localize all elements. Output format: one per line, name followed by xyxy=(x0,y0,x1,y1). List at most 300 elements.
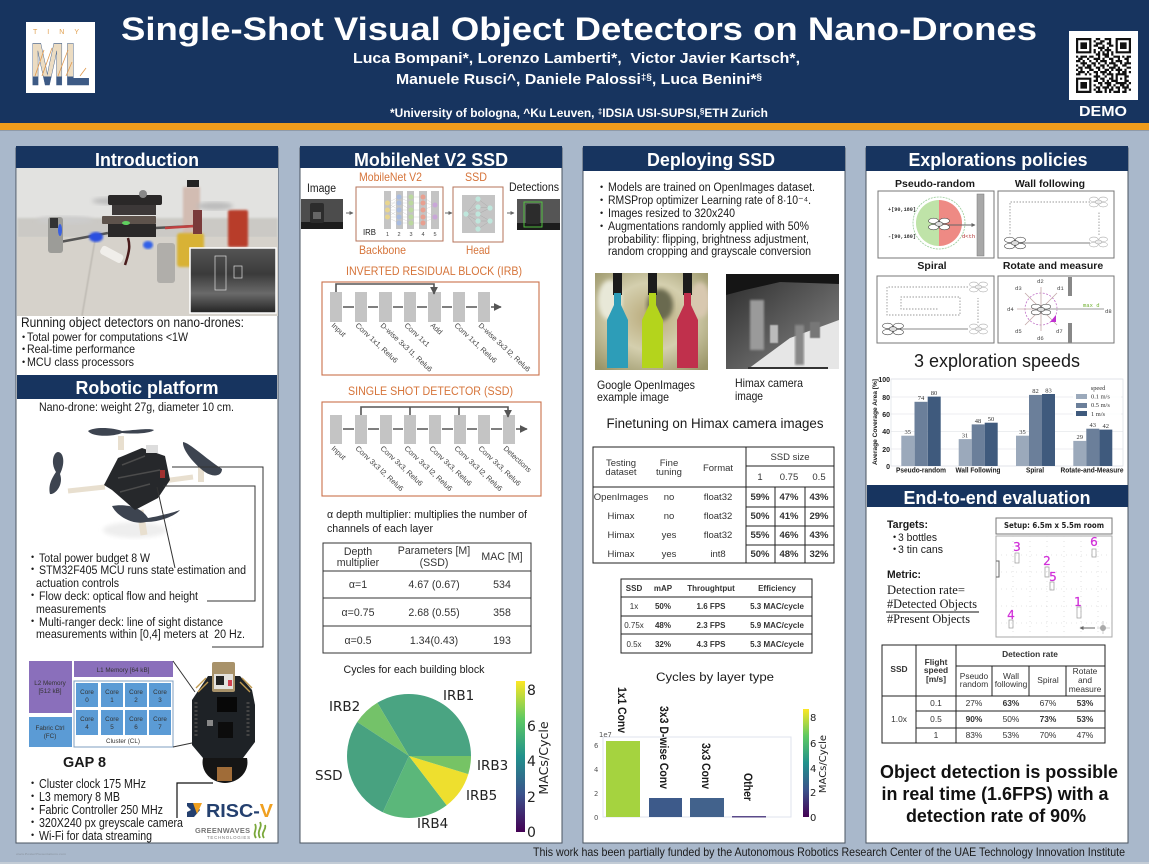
diagram: single shot detector: Conv 3x3, Relu6 xyxy=(428,444,474,488)
colorbar: MACs/Cycle: 0 xyxy=(810,813,816,824)
conclusion callout xyxy=(880,762,1118,826)
conclusion callout: Object detection is possible xyxy=(880,762,1118,782)
table: detection rate: Pseudo xyxy=(960,671,989,681)
table: depth multiplier xyxy=(323,543,531,653)
diagram: network overview: Head xyxy=(466,243,490,257)
table: depth multiplier: 2.68 (0.55) xyxy=(408,607,460,619)
bar chart: coverage by policy and speed: 31 xyxy=(962,432,968,440)
table: finetuning results: tuning xyxy=(656,467,682,478)
table: depth multiplier: multiplier xyxy=(337,557,380,569)
heading: deploying SSD: Deploying SSD xyxy=(647,150,775,170)
diagram: inverted residual block: INVERTED RESIDUAL BLOCK (IRB) xyxy=(346,264,522,278)
affiliations: ‡ xyxy=(598,107,602,116)
table: finetuning results: 32% xyxy=(809,549,829,560)
table: detection rate: following xyxy=(995,679,1028,689)
diagram: inverted residual block: D-wise 3x3 l1, Relu6 xyxy=(379,321,434,374)
text block: training bullets: RMSProp optimizer Learning rate of 8·10⁻⁴. xyxy=(608,195,811,207)
table: finetuning results: Fine xyxy=(660,458,678,469)
text block: GAP8 bullets: • xyxy=(31,778,34,788)
table: finetuning results: no xyxy=(664,511,674,522)
diagram: setup room map: 4 xyxy=(1007,608,1015,622)
authors: Manuele Rusci^, Daniele Palossi xyxy=(396,72,620,88)
authors: § xyxy=(757,72,762,82)
pie chart: cycles for each building block: IRB1 xyxy=(443,688,474,704)
table: detection rate: Rotate xyxy=(1073,666,1098,676)
diagram: GAP8 architecture: 1 xyxy=(110,697,114,704)
panel: introduction and robotic platform xyxy=(16,146,278,843)
diagram: inverted residual block: Add xyxy=(429,321,444,336)
text block: training bullets: Images resized to 320x240 xyxy=(608,208,735,220)
text block: targets and metric: Metric: xyxy=(887,569,921,581)
demo label: DEMO xyxy=(1079,103,1127,120)
diagram: GAP8 architecture: Core xyxy=(105,716,119,723)
text block: intro bullets: Running object detectors on nano-drones: xyxy=(21,315,244,330)
table: detection rate: [m/s] xyxy=(926,674,946,684)
text block: targets and metric: 3 tin cans xyxy=(898,544,943,556)
diagram: GAP8 architecture: 4 xyxy=(85,724,89,731)
table: detection rate: 53% xyxy=(1077,714,1094,724)
table: finetuning results: float32 xyxy=(704,492,732,503)
text block: targets and metric xyxy=(886,519,979,626)
heading: MobileNet V2 SSD: MobileNet V2 SSD xyxy=(354,150,508,170)
text block: targets and metric: Targets: xyxy=(887,519,928,531)
table: throughput and efficiency: Efficiency xyxy=(758,584,796,593)
diagram: GAP8 architecture: Core xyxy=(80,689,94,696)
photo: Himax camera image xyxy=(726,274,839,369)
heading: end-to-end evaluation: End-to-end evaluation xyxy=(904,488,1090,508)
diagram: GAP8 architecture: 5 xyxy=(110,724,114,731)
diagram: inverted residual block: Conv 1x1 xyxy=(403,321,432,349)
bar chart: coverage by policy and speed: 43 xyxy=(1090,422,1096,429)
table: depth multiplier: 1.34(0.43) xyxy=(410,635,458,647)
text block: training bullets xyxy=(600,182,815,258)
diagram: single shot detector: Conv 3x3 l2, Relu6 xyxy=(354,444,405,493)
diagram: GAP8 architecture: Core xyxy=(105,689,119,696)
text block: intro bullets: • xyxy=(22,344,25,354)
diagram: network overview: 2 xyxy=(397,232,401,238)
logo: tinyML: ML xyxy=(30,31,90,98)
text block: training bullets: Models are trained on OpenImages dataset. xyxy=(608,182,815,194)
table: finetuning results: no xyxy=(664,492,674,503)
text block: GAP8 bullets xyxy=(31,777,183,843)
bar chart: coverage by policy and speed: 100 xyxy=(878,377,890,384)
table: detection rate: Spiral xyxy=(1037,675,1059,685)
table: throughput and efficiency: mAP xyxy=(654,584,673,593)
photo: crazyflie nano-drone xyxy=(49,428,222,538)
heading: introduction xyxy=(16,146,278,170)
conclusion callout: detection rate of 90% xyxy=(906,806,1086,826)
text block: platform bullets: • xyxy=(31,552,34,562)
text block: intro bullets: • xyxy=(22,357,25,367)
authors xyxy=(353,51,800,88)
text block: platform bullets: STM32F405 MCU runs state estimation and xyxy=(39,563,246,577)
panel: MobileNet V2 SSD xyxy=(300,146,562,843)
affiliations: ETH Zurich xyxy=(704,106,768,120)
diagram: rotate and measure policy: d1 xyxy=(1057,285,1064,292)
diagram: network overview: Backbone xyxy=(359,243,406,257)
pie chart: cycles for each building block: IRB4 xyxy=(417,816,448,832)
bar chart: coverage by policy and speed: 80 xyxy=(882,395,890,402)
text block: platform bullets: • xyxy=(31,564,34,574)
text block: intro bullets xyxy=(21,315,244,369)
table: finetuning results: int8 xyxy=(710,549,726,560)
colorbar: MACs/Cycle: 2 xyxy=(527,790,536,806)
chart title: cycles per block: Cycles for each building block xyxy=(344,664,485,676)
table: throughput and efficiency: SSD xyxy=(626,584,642,593)
table: throughput and efficiency: 5.3 MAC/cycle xyxy=(750,602,804,611)
table: detection rate: 27% xyxy=(966,698,983,708)
diagram: rotate and measure policy: max d xyxy=(1083,302,1100,309)
diagram: inverted residual block: Conv 1x1, Relu6 xyxy=(453,321,499,365)
text block: intro bullets: Total power for computations <1W xyxy=(27,330,189,344)
bar chart: coverage by policy and speed: Wall Following xyxy=(956,466,1000,474)
bar chart: coverage by policy and speed: 20 xyxy=(882,447,890,454)
logo: tinyML: TINY xyxy=(33,29,79,36)
heading: MobileNet V2 SSD xyxy=(300,146,562,170)
footer: printer credit: www.PosterPresentations.com xyxy=(16,852,67,856)
table: detection rate: 1.0x xyxy=(891,714,908,724)
text block: depth multiplier: channels of each layer xyxy=(327,523,433,535)
diagram: network overview: 3 xyxy=(409,232,413,238)
diagram: inverted residual block xyxy=(322,264,539,375)
table: detection rate: 90% xyxy=(966,714,983,724)
text block: training bullets: random cropping and grayscale conversion xyxy=(608,246,811,258)
diagram: GAP8 architecture: Core xyxy=(153,689,167,696)
table: detection rate: 73% xyxy=(1040,714,1057,724)
table: finetuning results: 43% xyxy=(809,530,829,541)
diagram: single shot detector: Conv 3x3 l2, Relu6 xyxy=(453,444,504,493)
diagram: inverted residual block: Conv 1x1, Relu6 xyxy=(354,321,400,365)
photo: OpenImages colored bottles xyxy=(595,273,710,370)
diagram: GAP8 architecture: Core xyxy=(153,716,167,723)
diagram: inverted residual block: D-wise 3x3 l2, Relu6 xyxy=(477,321,532,374)
legend: speed: 0.1 m/s xyxy=(1091,394,1110,400)
text block: targets and metric: #Detected Objects xyxy=(887,597,977,611)
bar chart: cycles by layer type: 3x3 D-wise Conv xyxy=(657,706,671,789)
bar chart: cycles by layer type: 4 xyxy=(594,766,598,774)
diagram: single shot detector: Conv 3x3 l2, Relu6 xyxy=(403,444,454,493)
captions: example images: Google OpenImages xyxy=(597,378,695,392)
table: depth multiplier: 534 xyxy=(493,579,511,591)
bar chart: coverage by policy and speed: 82 xyxy=(1032,388,1039,395)
diagram: network overview: Detections xyxy=(509,182,559,194)
table: throughput and efficiency: 5.9 MAC/cycle xyxy=(750,621,804,630)
bar chart: cycles by layer type: 1x1 Conv xyxy=(615,687,629,733)
diagram: inverted residual block: Input xyxy=(330,321,348,339)
table: detection rate: 0.5 xyxy=(930,714,942,724)
heading: robotic platform xyxy=(17,375,277,399)
table: finetuning results: Himax xyxy=(608,549,635,560)
table: detection rate: 0.1 xyxy=(930,698,942,708)
diagram: spiral policy: Spiral xyxy=(917,260,947,272)
affiliations: § xyxy=(700,107,705,116)
table: finetuning results: Himax xyxy=(608,511,635,522)
diagram: GAP8 architecture xyxy=(29,661,173,747)
text block: platform bullets: Multi-ranger deck: line of sight distance xyxy=(39,615,223,629)
diagram: GAP8 architecture: Core xyxy=(129,716,143,723)
inset: grayscale detection view xyxy=(190,248,276,313)
text block: training bullets: Augmentations randomly applied with 50% xyxy=(608,221,809,233)
text block: GAP8 bullets: 320X240 px greyscale camera xyxy=(39,816,183,830)
pie chart: cycles for each building block: IRB2 xyxy=(329,699,360,715)
table: detection rate: measure xyxy=(1069,684,1102,694)
diagram: rotate and measure policy: d8 xyxy=(1105,308,1112,315)
diagram: rotate and measure policy: d7 xyxy=(1056,328,1063,335)
diagram: GAP8 architecture: Cluster (CL) xyxy=(106,738,140,745)
table: detection rate: speed xyxy=(924,665,948,675)
photo: drone with detection inset xyxy=(17,168,278,316)
pie chart: cycles for each building block xyxy=(315,688,508,832)
table: detection rate: 53% xyxy=(1003,730,1020,740)
bar chart: coverage by policy and speed: 29 xyxy=(1077,434,1083,441)
legend: speed: 1 m/s xyxy=(1091,411,1106,418)
captions: example images xyxy=(597,376,803,404)
table: finetuning results: 29% xyxy=(809,511,829,522)
bar chart: cycles by layer type: 0 xyxy=(594,814,598,822)
table: finetuning results: Format xyxy=(703,463,733,474)
diagram: GAP8 architecture: 7 xyxy=(158,724,162,731)
table: finetuning results: float32 xyxy=(704,511,732,522)
diagram: setup room map: 3 xyxy=(1013,540,1021,554)
table: finetuning results: 47% xyxy=(779,492,799,503)
diagram: GAP8 architecture: 3 xyxy=(158,697,162,704)
pie chart: cycles for each building block: IRB5 xyxy=(466,788,497,804)
pie chart: cycles for each building block: IRB3 xyxy=(477,758,508,774)
diagram: spiral policy xyxy=(877,260,994,343)
heading: explorations policies: Explorations policies xyxy=(908,150,1088,170)
logo: tinyML xyxy=(26,22,95,98)
table: detection rate: 50% xyxy=(1003,714,1020,724)
heading: deploying SSD xyxy=(583,146,845,171)
heading: introduction: Introduction xyxy=(95,150,199,170)
diagram: network overview: SSD xyxy=(465,170,487,184)
arrows: drone parts callouts xyxy=(157,467,263,647)
captions: example images: example image xyxy=(597,390,669,404)
bar chart: coverage by policy and speed: 0 xyxy=(886,464,890,471)
diagram: network overview: MobileNet V2 xyxy=(359,170,422,184)
table: depth multiplier: α=0.75 xyxy=(342,607,375,619)
table: throughput and efficiency: 32% xyxy=(655,640,671,649)
colorbar: MACs/Cycle: MACs/Cycle xyxy=(818,735,829,793)
heading: GAP 8: GAP 8 xyxy=(63,754,106,771)
table: depth multiplier: Parameters [M] xyxy=(398,545,470,557)
diagram: GAP8 architecture: L2 Memory xyxy=(34,680,67,687)
diagram: setup room map: 5 xyxy=(1049,570,1057,584)
diagram: GAP8 architecture: L1 Memory [64 kB] xyxy=(97,667,150,674)
diagram: GAP8 architecture: Core xyxy=(129,689,143,696)
table: detection rate: 70% xyxy=(1040,730,1057,740)
diagram: single shot detector: Input xyxy=(330,444,348,462)
diagram: pseudo-random policy xyxy=(878,178,994,258)
text block: GAP8 bullets: • xyxy=(31,804,34,814)
text block: targets and metric: 3 bottles xyxy=(898,532,937,544)
table: detection rate: 47% xyxy=(1077,730,1094,740)
diagram: pseudo-random policy: -[90,180] xyxy=(888,234,916,240)
bar chart: coverage by policy and speed: 60 xyxy=(882,412,890,419)
text block: GAP8 bullets: • xyxy=(31,830,34,840)
bar chart: cycles by layer type: 6 xyxy=(594,742,598,750)
diagram: rotate and measure policy: d2 xyxy=(1037,278,1044,285)
colorbar: MACs/Cycle: 8 xyxy=(810,713,816,724)
table: detection rate: Wall xyxy=(1003,671,1019,681)
bar chart: cycles by layer type: Other xyxy=(741,773,755,801)
diagram: wall following policy: Wall following xyxy=(1015,178,1085,190)
text block: training bullets: • xyxy=(600,182,603,192)
table: finetuning results: 0.75 xyxy=(780,472,798,483)
table: detection rate: 63% xyxy=(1003,698,1020,708)
diagram: rotate and measure policy: Rotate and measure xyxy=(1003,260,1103,272)
diagram: pseudo-random policy: Pseudo-random xyxy=(895,178,975,190)
panel: exploration policies and end-to-end evaluation xyxy=(866,146,1128,843)
pie chart: cycles for each building block: SSD xyxy=(315,768,343,784)
diagram: GAP8 architecture: Core xyxy=(80,716,94,723)
table: detection rate: 1 xyxy=(934,730,939,740)
colorbar: MACs/Cycle: MACs/Cycle xyxy=(536,721,551,795)
diagram: GAP8 architecture: [512 kB] xyxy=(38,688,62,695)
table: throughput and efficiency: 4.3 FPS xyxy=(697,640,726,649)
diagram: single shot detector: Conv 3x3, Relu6 xyxy=(477,444,523,488)
diagram: rotate and measure policy: d5 xyxy=(1015,328,1022,335)
legend: speed: 0.5 m/s xyxy=(1091,402,1110,409)
colorbar: MACs/Cycle: 8 xyxy=(527,683,536,699)
diagram: rotate and measure policy: d3 xyxy=(1015,285,1022,292)
colorbar: MACs/Cycle xyxy=(803,709,829,824)
text block: platform bullets: measurements xyxy=(36,602,106,616)
table: throughput and efficiency: Throughtput xyxy=(687,584,735,593)
diagram: setup room map: 1 xyxy=(1074,595,1082,609)
colorbar: MACs/Cycle: 2 xyxy=(810,788,816,799)
bar chart: coverage by policy and speed: Pseudo-random xyxy=(896,466,946,474)
bar chart: coverage by policy and speed xyxy=(872,377,1124,474)
logo: RISC-V: RISC- V xyxy=(206,801,273,821)
diagram: setup room map xyxy=(996,518,1112,637)
text block: intro bullets: MCU class processors xyxy=(27,355,134,369)
table: detection rate: Detection rate xyxy=(1002,649,1058,659)
captions: example images: image xyxy=(735,389,763,403)
label: image: Image xyxy=(307,183,336,195)
text block: platform bullets: • xyxy=(31,590,34,600)
text block: intro bullets: Real-time performance xyxy=(27,342,135,356)
colorbar: MACs/Cycle: 6 xyxy=(527,719,536,735)
diagram: wall following policy xyxy=(998,178,1114,258)
conclusion callout: in real time (1.6FPS) with a xyxy=(882,784,1109,804)
diagram: single shot detector: Conv 3x3, Relu6 xyxy=(379,444,425,488)
logo: GreenWaves xyxy=(195,822,265,840)
chart title: cycles by layer type: Cycles by layer type xyxy=(656,670,774,684)
text block: GAP8 bullets: Cluster clock 175 MHz xyxy=(39,777,146,791)
table: finetuning results: Testing xyxy=(606,458,636,469)
table: throughput and efficiency: 1x xyxy=(630,602,638,611)
table: finetuning results: float32 xyxy=(704,530,732,541)
text block: GAP8 bullets: • xyxy=(31,791,34,801)
text block: platform bullets: • xyxy=(31,616,34,626)
diagram: network overview: IRB xyxy=(363,228,376,237)
diagram: network overview xyxy=(301,170,560,257)
diagram: single shot detector xyxy=(322,384,541,496)
heading: finetuning: Finetuning on Himax camera images xyxy=(606,416,824,431)
table: depth multiplier: Depth xyxy=(344,546,372,558)
header banner xyxy=(0,0,1149,131)
authors: , Luca Benini* xyxy=(652,72,757,88)
diagram: network overview: 4 xyxy=(421,232,425,238)
table: finetuning results: 46% xyxy=(779,530,799,541)
table: finetuning results: 41% xyxy=(779,511,799,522)
diagram: single shot detector: SINGLE SHOT DETECTOR (SSD) xyxy=(348,384,513,398)
authors: Luca Bompani*, Lorenzo Lamberti*, Victor Javier Kartsch*, xyxy=(353,51,800,67)
arrow: camera callout xyxy=(177,783,213,818)
diagram: GAP8 architecture: 6 xyxy=(134,724,138,731)
colorbar: MACs/Cycle: 4 xyxy=(527,754,536,770)
table: finetuning results: 1 xyxy=(757,472,763,483)
table: finetuning results xyxy=(593,447,834,563)
text block: platform bullets: Total power budget 8 W xyxy=(39,551,150,565)
bar chart: coverage by policy and speed: Spiral xyxy=(1026,466,1044,474)
text block: targets and metric: #Present Objects xyxy=(887,612,970,626)
panel: deploying SSD xyxy=(583,146,845,843)
table: depth multiplier: α=1 xyxy=(349,579,367,591)
bar chart: coverage by policy and speed: 35 xyxy=(1019,429,1026,436)
text block: GAP8 bullets: Wi-Fi for data streaming xyxy=(39,829,152,843)
table: depth multiplier: 358 xyxy=(493,607,511,619)
colorbar: MACs/Cycle: 6 xyxy=(810,739,816,750)
bar chart: coverage by policy and speed: 83 xyxy=(1045,388,1052,394)
heading: 3 exploration speeds: 3 exploration speeds xyxy=(914,351,1080,371)
table: finetuning results: yes xyxy=(662,530,677,541)
table: finetuning results: Himax xyxy=(608,530,635,541)
diagram: GAP8 architecture: 2 xyxy=(134,697,138,704)
table: finetuning results: OpenImages xyxy=(594,492,648,503)
diagram: setup room map: 2 xyxy=(1043,554,1051,568)
table: finetuning results: dataset xyxy=(605,467,637,478)
legend: speed: speed xyxy=(1091,385,1106,392)
table: finetuning results: SSD size xyxy=(770,452,810,463)
diagram: rotate and measure policy xyxy=(998,260,1114,343)
bar chart: coverage by policy and speed: 48 xyxy=(975,418,981,425)
text block: targets and metric: Detection rate= xyxy=(887,583,965,597)
table: depth multiplier: α=0.5 xyxy=(344,635,372,647)
table: throughput and efficiency: 2.3 FPS xyxy=(697,621,726,630)
table: depth multiplier: MAC [M] xyxy=(481,551,523,563)
logo: GreenWaves: TECHNOLOGIES xyxy=(207,835,250,840)
table: detection rate: 83% xyxy=(966,730,983,740)
heading: robotic platform: Robotic platform xyxy=(76,378,218,398)
text block: depth multiplier xyxy=(327,509,528,535)
heading: explorations policies xyxy=(866,146,1128,171)
text block: training bullets: • xyxy=(600,208,603,218)
logo: GreenWaves: GREENWAVES xyxy=(195,826,250,835)
bar chart: cycles by layer type: 1e7 xyxy=(599,731,612,739)
diagram: GAP8 architecture: 0 xyxy=(85,697,89,704)
table: throughput and efficiency xyxy=(621,579,812,653)
text block: targets and metric: • xyxy=(893,544,896,554)
bar chart: coverage by policy and speed: Rotate-and-Measure xyxy=(1060,466,1124,474)
text block: platform bullets xyxy=(31,551,246,641)
bar chart: coverage by policy and speed: 42 xyxy=(1103,423,1109,430)
text block: platform bullets: Flow deck: optical flow and height xyxy=(39,589,198,603)
table: finetuning results: 50% xyxy=(750,511,770,522)
table: detection rate: 67% xyxy=(1040,698,1057,708)
diagram: rotate and measure policy: d4 xyxy=(1007,306,1014,313)
table: finetuning results: 48% xyxy=(779,549,799,560)
text block: training bullets: • xyxy=(600,221,603,231)
title: Single-Shot Visual Object Detectors on Nano-Drones xyxy=(121,11,1037,47)
bar chart: coverage by policy and speed: 35 xyxy=(905,429,911,436)
table: finetuning results: yes xyxy=(662,549,677,560)
diagram: pseudo-random policy: +[90,180] xyxy=(888,207,916,213)
text block: platform bullets: measurements within [0,4] meters at 20 Hz. xyxy=(36,627,245,641)
table: detection rate xyxy=(882,645,1105,743)
thumbnail: detection output xyxy=(517,199,560,230)
